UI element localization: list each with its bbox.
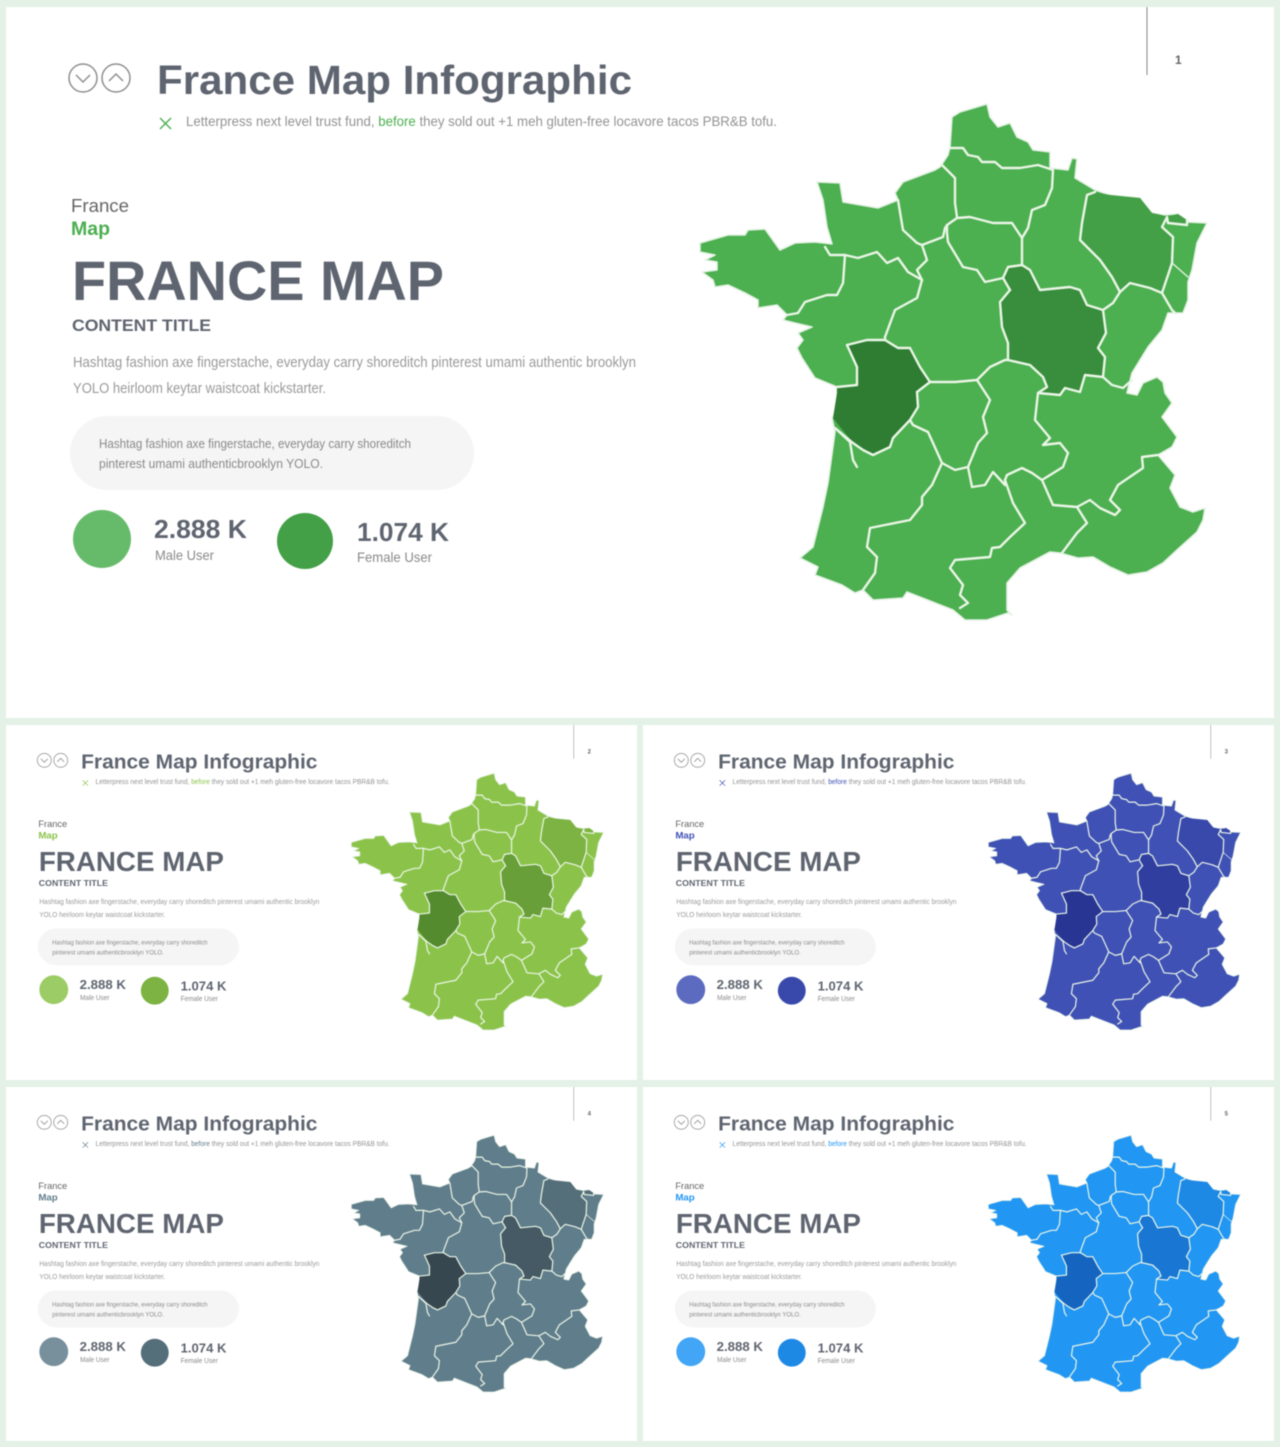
panel: main green slide [6,7,1274,718]
stat: female users: Female User [818,996,856,1003]
page number [574,725,592,759]
callout pill: Hashtag fashion axe fingerstache, everyday carry shoreditch [52,1301,208,1308]
callout pill: pinterest umami authenticbrooklyn YOLO. [52,1311,164,1318]
subtitle: Letterpress next level trust fund, before they sold out +1 meh gluten-free locavore tacos PBR&B tofu. [733,779,1027,786]
stat: male users [39,1337,127,1366]
stat: female users: 1.074 K [818,1341,864,1356]
title: France Map Infographic [718,751,954,773]
callout pill [38,929,239,965]
heading: FRANCE MAP [676,846,861,877]
heading: FRANCE MAP [676,1208,861,1239]
stat: female users [141,1339,227,1367]
label: Map: Map [38,1192,58,1203]
subtitle: Letterpress next level trust fund, before they sold out +1 meh gluten-free locavore tacos PBR&B tofu. [96,779,390,786]
content title: CONTENT TITLE [39,1240,108,1250]
heading: FRANCE MAP [39,1208,224,1239]
paragraph: YOLO heirloom keytar waistcoat kickstarter. [73,381,326,397]
content title: CONTENT TITLE [676,878,745,888]
paragraph: YOLO heirloom keytar waistcoat kickstarter. [39,1272,165,1281]
stat: male users: Male User [717,995,747,1002]
map of France [700,104,1207,620]
callout pill [675,1291,876,1327]
stat: female users: Female User [818,1358,856,1365]
stat: female users: 1.074 K [818,979,864,994]
paragraph: Hashtag fashion axe fingerstache, everyday carry shoreditch pinterest umami authentic brooklyn [39,1259,319,1268]
heading: FRANCE MAP [72,249,444,312]
map of France [988,773,1241,1030]
paragraph [39,897,319,919]
icon: arrow circles [674,1115,705,1129]
stat: female users: Female User [181,1358,219,1365]
callout pill: Hashtag fashion axe fingerstache, everyday carry shoreditch [689,1301,845,1308]
stat: male users: 2.888 K [80,1339,127,1354]
icon: cross mark [83,780,88,786]
icon: arrow circles [674,753,705,767]
stat: female users: Female User [357,549,432,565]
label: Map: Map [675,830,695,841]
icon: cross mark [720,1142,725,1148]
label: Map: Map [675,1192,695,1203]
subtitle: Letterpress next level trust fund, before they sold out +1 meh gluten-free locavore tacos PBR&B tofu. [186,113,777,129]
label: Map: Map [71,219,110,240]
page number [1147,7,1182,75]
callout pill: Hashtag fashion axe fingerstache, everyday carry shoreditch [52,939,208,946]
stat: male users: 2.888 K [80,977,127,992]
stat: male users: 2.888 K [717,1339,764,1354]
label: France: France [675,819,704,829]
stat: female users [141,977,227,1005]
subtitle: Letterpress next level trust fund, before they sold out +1 meh gluten-free locavore tacos PBR&B tofu. [96,1141,390,1148]
title: France Map Infographic [81,1113,317,1135]
stat: female users: 1.074 K [181,1341,227,1356]
stat: female users: Female User [181,996,219,1003]
paragraph: YOLO heirloom keytar waistcoat kickstarter. [676,910,802,919]
stat: female users: 1.074 K [357,517,449,547]
map of France [351,773,604,1030]
callout pill [70,416,474,490]
map silhouette [700,104,1207,620]
stat: female users: 1.074 K [181,979,227,994]
page number [1211,1087,1229,1121]
page number: 5 [1225,1111,1229,1117]
content title: CONTENT TITLE [72,316,211,335]
paragraph: Hashtag fashion axe fingerstache, everyday carry shoreditch pinterest umami authentic brooklyn [676,1259,956,1268]
icon: cross mark [720,780,725,786]
callout pill: Hashtag fashion axe fingerstache, everyday carry shoreditch [99,437,411,451]
label: Map: Map [38,830,58,841]
stat: male users: Male User [155,547,214,563]
page number [574,1087,592,1121]
page number: 1 [1175,53,1182,67]
icon: arrow circles [37,1115,68,1129]
paragraph [676,1259,956,1281]
region: Lorraine shaded [1080,192,1187,293]
callout pill: pinterest umami authenticbrooklyn YOLO. [52,949,164,956]
callout pill [675,929,876,965]
label: France: France [38,819,67,829]
panel: blue slide [643,1087,1274,1441]
callout pill [38,1291,239,1327]
stat: male users: 2.888 K [717,977,764,992]
heading: FRANCE MAP [39,846,224,877]
paragraph: Hashtag fashion axe fingerstache, everyday carry shoreditch pinterest umami authentic brooklyn [73,355,636,371]
subtitle: Letterpress next level trust fund, before they sold out +1 meh gluten-free locavore tacos PBR&B tofu. [733,1141,1027,1148]
stat: male users: Male User [80,1357,110,1364]
region: Poitou-Charentes shaded [833,340,930,455]
stat: female users [778,977,864,1005]
stat: male users: 2.888 K [154,514,247,544]
paragraph: YOLO heirloom keytar waistcoat kickstarter. [39,910,165,919]
panel: light green slide [6,725,637,1080]
paragraph: Hashtag fashion axe fingerstache, everyday carry shoreditch pinterest umami authentic brooklyn [39,897,319,906]
paragraph [73,355,636,397]
stat: male users: Male User [717,1357,747,1364]
title: France Map Infographic [718,1113,954,1135]
stat: male users [676,975,764,1004]
page number: 3 [1225,749,1229,755]
title: France Map Infographic [157,57,632,103]
label: France: France [675,1181,704,1191]
icon: cross mark [160,118,171,129]
page number: 4 [588,1111,592,1117]
callout pill: Hashtag fashion axe fingerstache, everyday carry shoreditch [689,939,845,946]
callout pill: pinterest umami authenticbrooklyn YOLO. [99,457,323,471]
paragraph [39,1259,319,1281]
page number: 2 [588,749,592,755]
panel: slate slide [6,1087,637,1441]
icon: cross mark [83,1142,88,1148]
region: Bourgogne shaded [1000,265,1106,395]
region borders [787,148,1188,608]
content title: CONTENT TITLE [676,1240,745,1250]
icon: arrow circles [69,64,130,92]
content title: CONTENT TITLE [39,878,108,888]
paragraph: YOLO heirloom keytar waistcoat kickstarter. [676,1272,802,1281]
callout pill: pinterest umami authenticbrooklyn YOLO. [689,1311,801,1318]
map of France [988,1135,1241,1392]
stat: female users [778,1339,864,1367]
stat: male users [39,975,127,1004]
label: France: France [71,196,129,216]
stat: male users [73,510,247,568]
icon: arrow circles [37,753,68,767]
callout pill: pinterest umami authenticbrooklyn YOLO. [689,949,801,956]
panel: indigo slide [643,725,1274,1080]
title: France Map Infographic [81,751,317,773]
stat: male users [676,1337,764,1366]
paragraph [676,897,956,919]
map of France [351,1135,604,1392]
paragraph: Hashtag fashion axe fingerstache, everyday carry shoreditch pinterest umami authentic brooklyn [676,897,956,906]
page number [1211,725,1229,759]
label: France: France [38,1181,67,1191]
stat: male users: Male User [80,995,110,1002]
stat: female users [277,513,449,569]
